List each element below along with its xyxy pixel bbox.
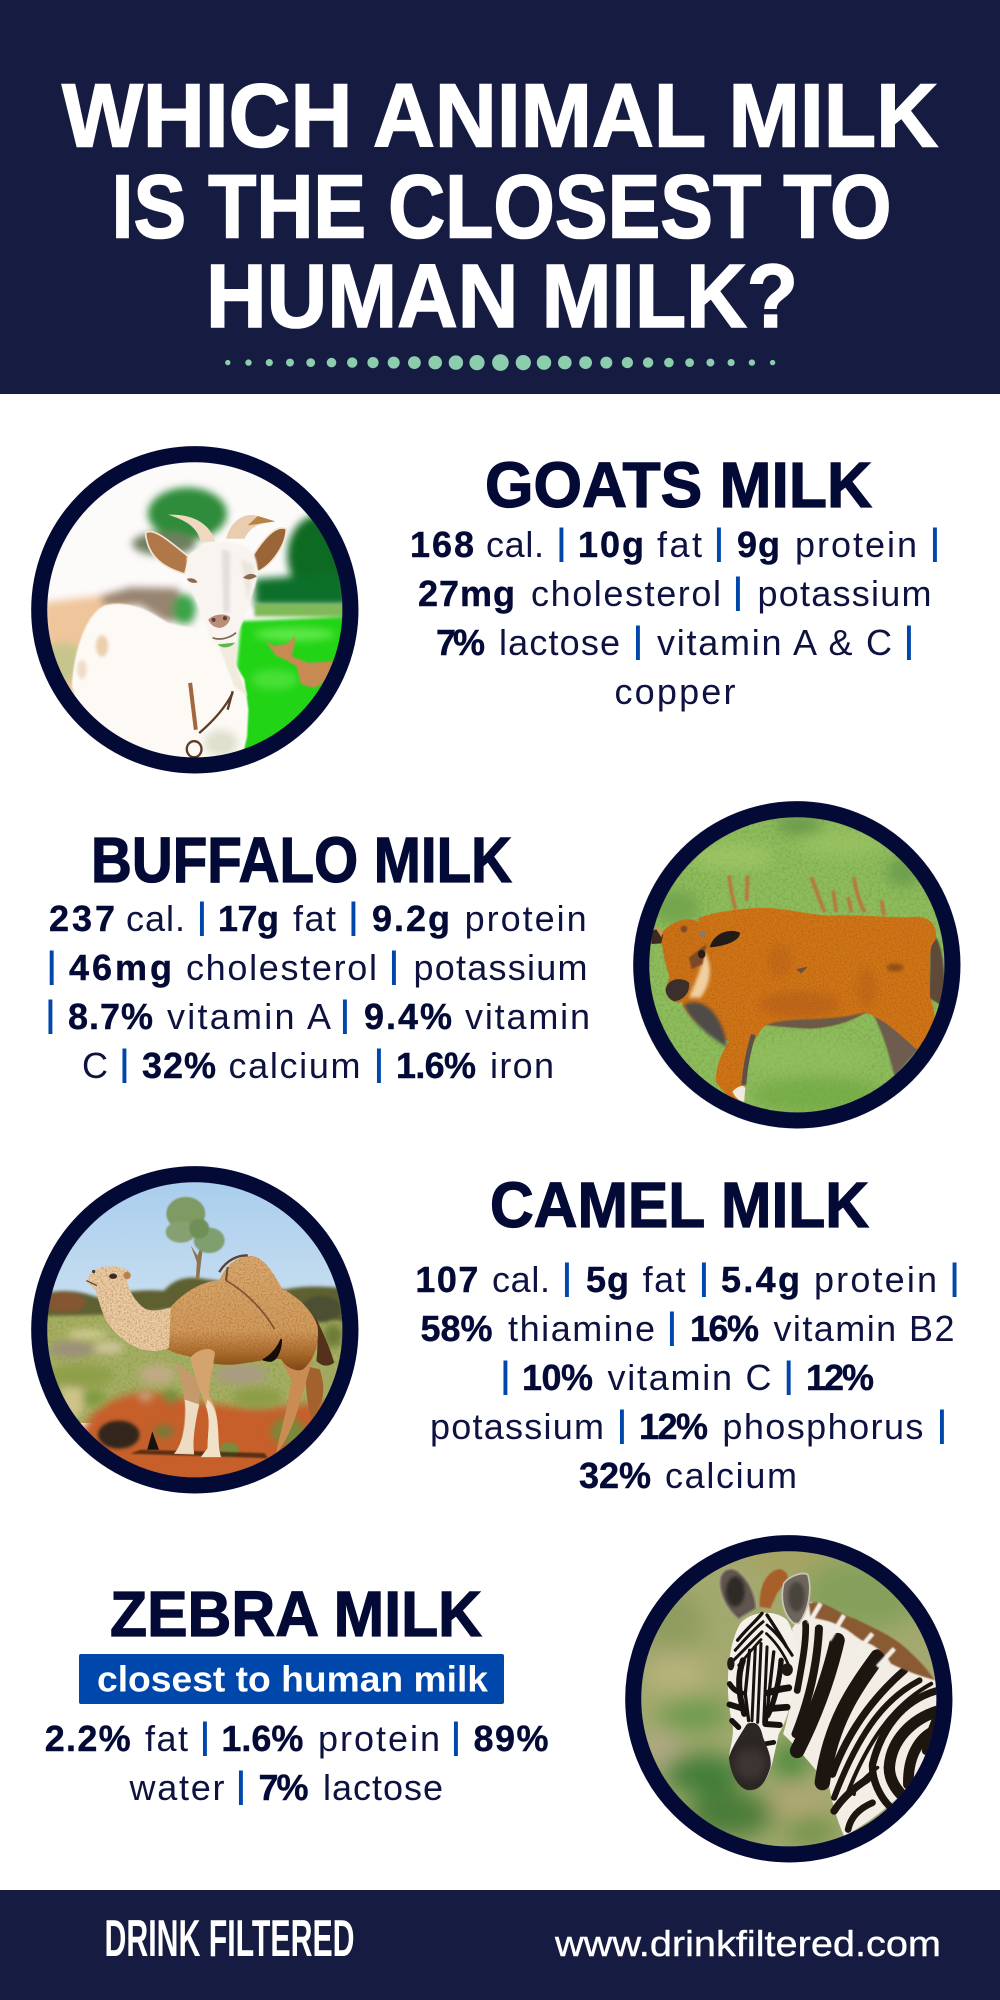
text: goats milk facts: potassium	[758, 573, 932, 614]
horns	[168, 515, 215, 542]
brand name: DRINK FILTERED	[104, 1910, 354, 1968]
text: camel milk facts: phosphorus	[722, 1406, 923, 1447]
text: buffalo milk facts	[46, 895, 590, 1086]
heading: zebra milk: ZEBRA MILK	[110, 1578, 482, 1650]
title	[62, 66, 938, 347]
text: zebra milk facts: lactose	[323, 1767, 443, 1808]
text: goats milk facts: cal.	[486, 524, 544, 565]
text: buffalo milk facts: 17g	[218, 898, 279, 939]
panel: buffalo milk	[46, 809, 952, 1120]
text: camel milk facts: 5.4g	[721, 1259, 800, 1300]
text: camel milk facts: |	[562, 1256, 572, 1297]
text: camel milk facts: |	[501, 1354, 510, 1395]
text: goats milk facts: 27mg	[418, 573, 515, 614]
ring	[39, 1174, 350, 1485]
text: buffalo milk facts: 237	[49, 898, 115, 939]
text: goats milk facts: protein	[795, 524, 917, 565]
text: zebra milk facts: fat	[145, 1718, 188, 1759]
crest	[760, 1569, 788, 1608]
red grass stalks	[729, 875, 884, 916]
text: camel milk facts: fat	[643, 1259, 686, 1300]
text: goats milk facts: 168	[410, 524, 474, 565]
text: camel milk facts: 107	[415, 1259, 478, 1300]
eyes	[727, 1657, 735, 1670]
text: goats milk facts: |	[930, 521, 940, 562]
text: buffalo milk facts: vitamin	[465, 996, 590, 1037]
collar	[187, 683, 233, 757]
bushes	[98, 1421, 140, 1449]
text: goats milk facts: |	[904, 619, 914, 660]
text: buffalo milk facts: |	[120, 1042, 129, 1083]
background deer	[266, 635, 333, 688]
ears	[720, 1570, 755, 1618]
distant tree	[166, 1197, 225, 1279]
text: buffalo milk facts: 9.2g	[372, 898, 450, 939]
text: camel milk facts: calcium	[665, 1455, 797, 1496]
text: buffalo milk facts: 32%	[142, 1045, 216, 1086]
text: buffalo milk facts: 9.4%	[364, 996, 452, 1037]
rear leg	[276, 1358, 313, 1453]
text: buffalo milk facts: vitamin A	[167, 996, 331, 1037]
ring	[633, 1543, 944, 1854]
text: camel milk facts: 12%	[639, 1406, 708, 1447]
dotted divider	[225, 354, 775, 371]
head	[187, 542, 258, 645]
text: camel milk facts	[415, 1256, 959, 1496]
footer banner	[0, 1890, 1000, 2000]
text: buffalo milk facts: potassium	[414, 947, 588, 988]
title: IS THE CLOSEST TO	[112, 158, 892, 258]
photo: zebra	[633, 1543, 945, 1855]
text: goats milk facts: 9g	[737, 524, 780, 565]
ring	[39, 454, 350, 765]
ears	[710, 931, 740, 947]
front leg	[190, 1349, 221, 1457]
text: goats milk facts: |	[557, 521, 566, 562]
text: goats milk facts: |	[633, 619, 643, 660]
text: zebra milk facts: |	[236, 1764, 246, 1805]
heading: camel milk: CAMEL MILK	[490, 1169, 869, 1241]
text: buffalo milk facts: C	[82, 1045, 108, 1086]
text: camel milk facts: |	[950, 1256, 959, 1297]
text: buffalo milk facts: iron	[490, 1045, 554, 1086]
text: goats milk facts: fat	[657, 524, 702, 565]
text: camel milk facts: 5g	[586, 1259, 629, 1300]
text: zebra milk facts: |	[200, 1715, 210, 1756]
text: goats milk facts: lactose	[499, 622, 620, 663]
neck and head	[88, 1266, 171, 1351]
text: camel milk facts: |	[699, 1256, 709, 1297]
text: buffalo milk facts: protein	[465, 898, 587, 939]
text: buffalo milk facts: fat	[293, 898, 336, 939]
text: camel milk facts: |	[937, 1403, 947, 1444]
text: buffalo milk facts: cholesterol	[186, 947, 377, 988]
camel body	[166, 1256, 318, 1370]
face details	[187, 578, 198, 583]
title: HUMAN MILK?	[206, 247, 798, 347]
photo: buffalo calf	[641, 809, 952, 1120]
badge: closest to human milk: closest to human milk	[97, 1658, 489, 1700]
text: goats milk facts	[410, 521, 940, 712]
heading: buffalo milk: BUFFALO MILK	[91, 824, 512, 896]
text: goats milk facts: vitamin A & C	[657, 622, 892, 663]
text: camel milk facts: 32%	[579, 1455, 651, 1496]
text: buffalo milk facts: calcium	[228, 1045, 360, 1086]
text: zebra milk facts: protein	[318, 1718, 440, 1759]
text: buffalo milk facts: |	[349, 895, 358, 936]
text: zebra milk facts: 1.6%	[221, 1718, 303, 1759]
text: camel milk facts: |	[617, 1403, 627, 1444]
text: camel milk facts: |	[784, 1354, 793, 1395]
text: camel milk facts: vitamin B2	[774, 1308, 954, 1349]
neck and body	[783, 1602, 938, 1836]
ears	[146, 532, 189, 574]
text: camel milk facts: vitamin C	[608, 1357, 772, 1398]
text: goats milk facts: 7%	[436, 622, 485, 663]
photo: goat	[39, 454, 350, 765]
header banner	[0, 0, 1000, 394]
panel: goats milk	[39, 449, 940, 765]
text: camel milk facts: thiamine	[508, 1308, 655, 1349]
ring	[641, 809, 952, 1120]
text: camel milk facts: 10%	[522, 1357, 593, 1398]
heading: goats milk: GOATS MILK	[485, 449, 872, 521]
text: camel milk facts: 16%	[690, 1308, 759, 1349]
text: zebra milk facts	[45, 1715, 548, 1808]
text: zebra milk facts: 7%	[258, 1767, 308, 1808]
photo: camel	[39, 1174, 350, 1487]
text: zebra milk facts: water	[128, 1767, 224, 1808]
text: camel milk facts: |	[667, 1305, 677, 1346]
text: goats milk facts: copper	[614, 671, 736, 712]
text: buffalo milk facts: 1.6%	[396, 1045, 476, 1086]
panel: zebra milk	[45, 1543, 945, 1855]
text: goats milk facts: |	[733, 570, 743, 611]
muzzle	[729, 1723, 771, 1790]
text: buffalo milk facts: |	[389, 944, 399, 985]
text: camel milk facts: 58%	[420, 1308, 492, 1349]
website url: www.drinkfiltered.com	[554, 1923, 941, 1964]
text: camel milk facts: protein	[814, 1259, 937, 1300]
far legs and tail	[174, 1363, 199, 1455]
text: buffalo milk facts: |	[46, 993, 55, 1034]
head	[728, 1613, 797, 1790]
body	[682, 908, 936, 1102]
text: buffalo milk facts: |	[47, 944, 56, 985]
text: buffalo milk facts: |	[197, 895, 207, 936]
mane	[809, 1602, 936, 1680]
panel: camel milk	[39, 1169, 959, 1496]
title: WHICH ANIMAL MILK	[62, 66, 938, 166]
text: buffalo milk facts: 8.7%	[68, 996, 153, 1037]
text: zebra milk facts: 89%	[474, 1718, 548, 1759]
belly fur	[766, 1012, 866, 1028]
text: buffalo milk facts: cal.	[126, 898, 185, 939]
back leg	[873, 1014, 923, 1076]
text: zebra milk facts: |	[451, 1715, 461, 1756]
text: zebra milk facts: 2.2%	[45, 1718, 131, 1759]
text: camel milk facts: cal.	[492, 1259, 550, 1300]
goat body	[72, 604, 248, 763]
text: buffalo milk facts: |	[340, 993, 350, 1034]
text: buffalo milk facts: |	[374, 1042, 384, 1083]
head	[662, 919, 713, 1003]
text: camel milk facts: 12%	[806, 1357, 874, 1398]
tail	[930, 936, 944, 1005]
text: goats milk facts: |	[714, 521, 724, 562]
text: goats milk facts: cholesterol	[531, 573, 721, 614]
text: camel milk facts: potassium	[430, 1406, 604, 1447]
text: goats milk facts: 10g	[578, 524, 644, 565]
text: buffalo milk facts: 46mg	[69, 947, 172, 988]
